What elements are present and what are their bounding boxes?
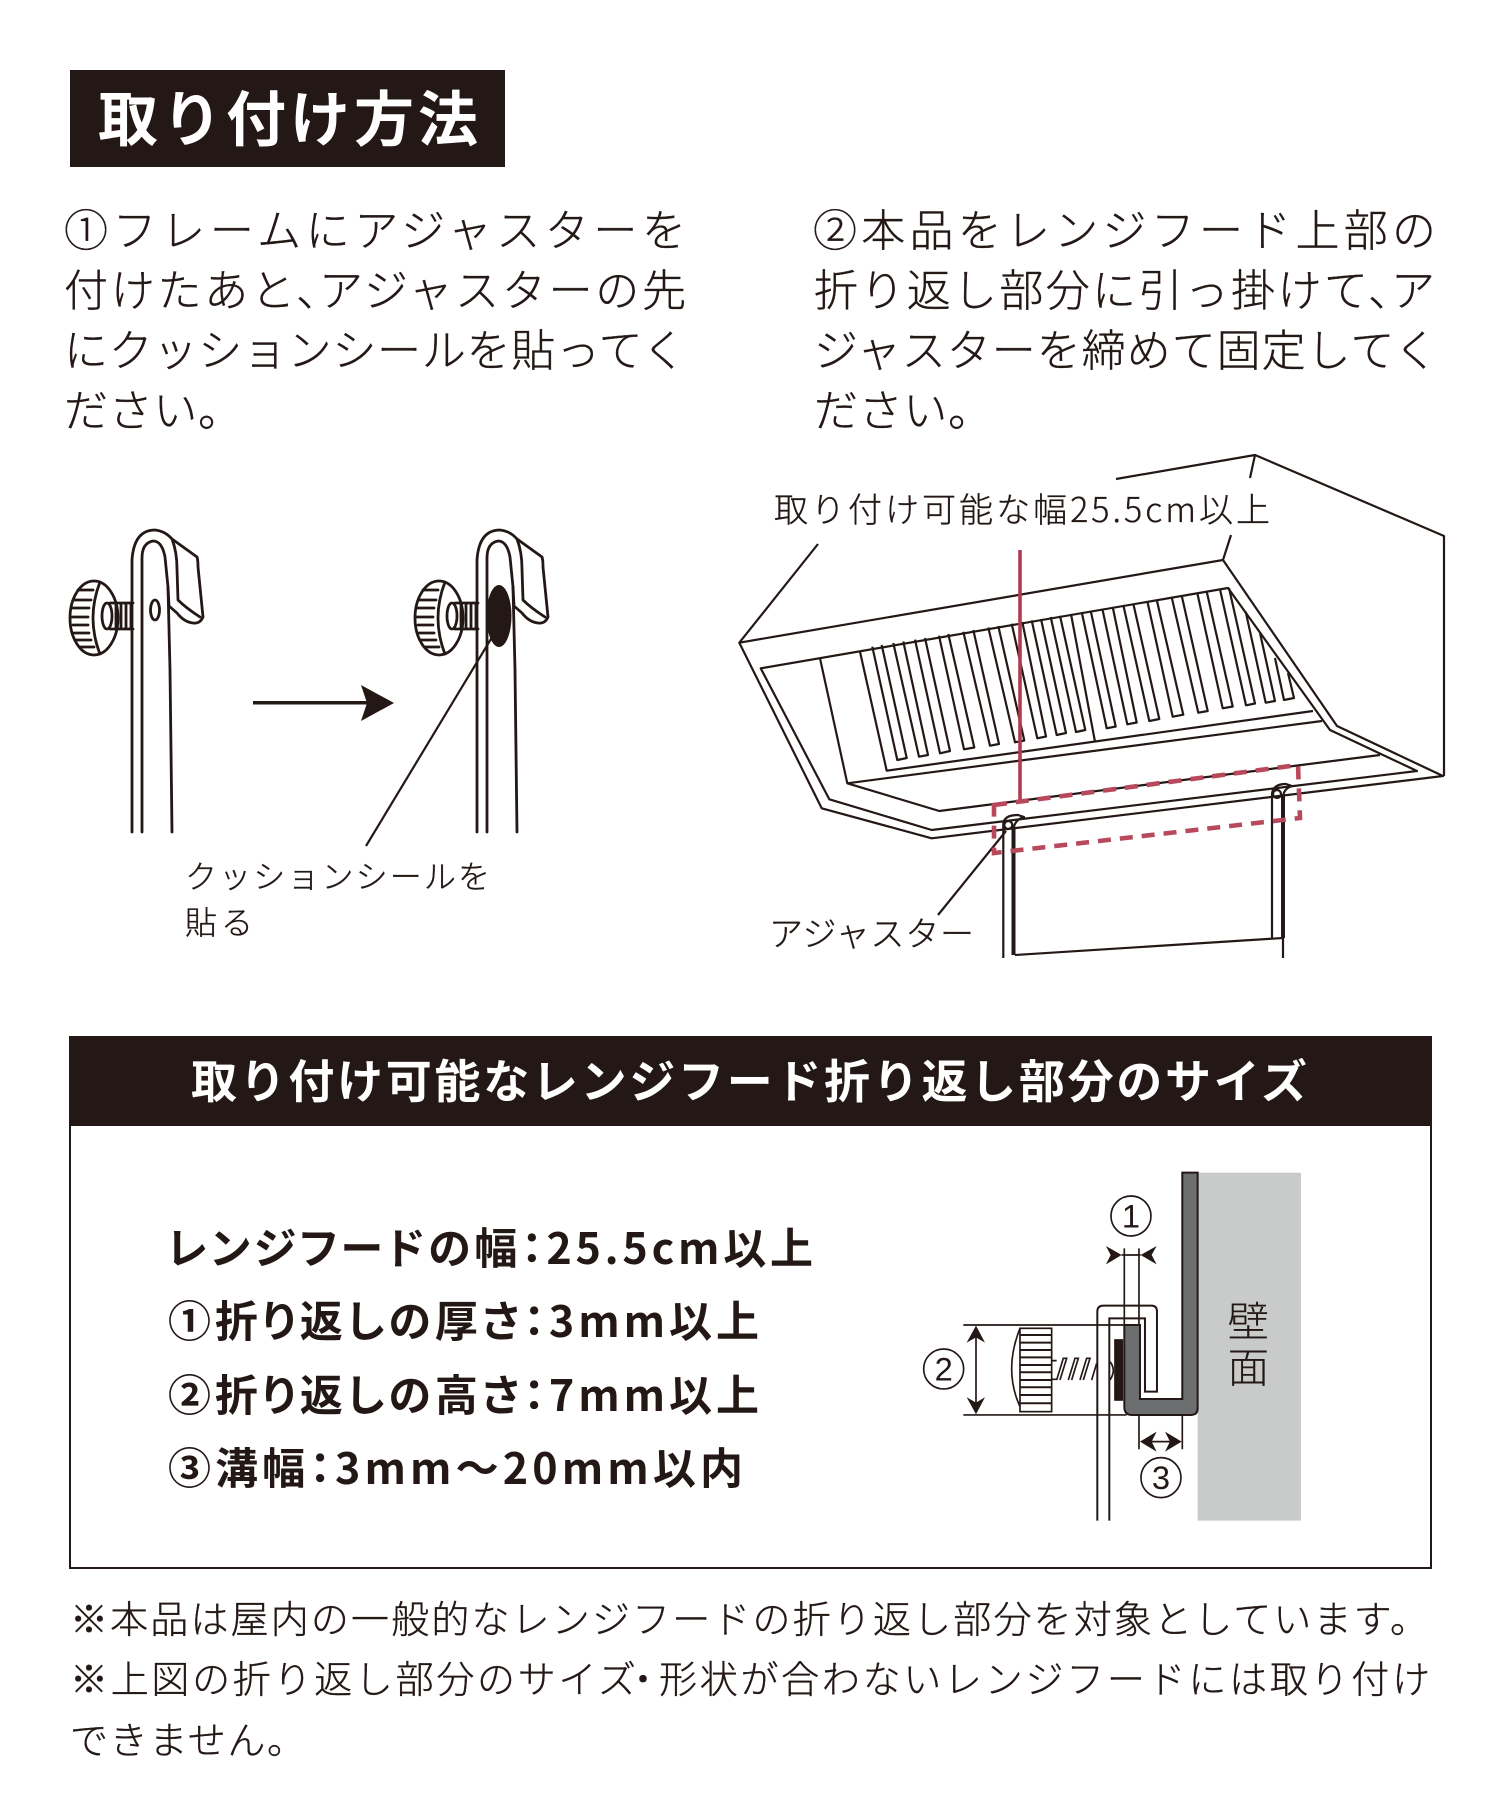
size list: ③溝幅：3mm～20mm以内: [168, 1435, 743, 1497]
panel heading: 取り付け可能なレンジフード折り返し部分のサイズ: [191, 1046, 1307, 1112]
text block: step 1: [64, 195, 686, 439]
diagram: adjuster and cushion seal: [70, 530, 548, 944]
hood fold bracket: [1124, 1173, 1198, 1415]
text block: step 2: ださい。: [814, 375, 992, 439]
callout: cushion seal: クッションシールを: [185, 852, 490, 898]
label 2: 2: [935, 1350, 953, 1387]
size list: ②折り返しの高さ：7mm以上: [168, 1362, 759, 1424]
label 1: [1111, 1196, 1151, 1236]
icon: hook frame with adjuster: [70, 530, 203, 832]
size list: ①折り返しの厚さ：3mm以上: [168, 1288, 759, 1350]
footnotes: ※本品は屋内の一般的なレンジフードの折り返し部分を対象としています。: [70, 1589, 1428, 1644]
callout: cushion seal: 貼る: [185, 898, 253, 944]
text block: step 1: ①フレームにアジャスターを: [64, 195, 686, 259]
adjuster knob and screw: [1012, 1328, 1122, 1412]
arrow: [253, 685, 394, 721]
text block: step 2: ジャスターを締めて固定してく: [814, 315, 1438, 379]
diagram: range hood: [739, 455, 1444, 958]
hood outline: [739, 455, 1444, 838]
footnotes: [70, 1589, 1430, 1765]
text block: step 2: ②本品をレンジフード上部の: [813, 195, 1436, 259]
label: adjuster: アジャスター: [769, 907, 974, 956]
size list: レンジフードの幅：25.5cm以上: [167, 1215, 813, 1277]
label 3: [1141, 1458, 1181, 1498]
panel heading: [69, 1036, 1432, 1126]
label 2: [924, 1349, 964, 1389]
label: mountable width: 取り付け可能な幅25.5cm以上: [774, 483, 1270, 532]
dimension lines: [963, 1248, 1182, 1449]
diagram: fold cross-section: [924, 1173, 1301, 1521]
text block: step 1: にクッションシールを貼ってく: [64, 315, 686, 379]
callout: cushion seal: [185, 852, 490, 944]
size list: [167, 1215, 813, 1497]
footnotes: 形状が合わないレンジフードには取り付け: [659, 1649, 1430, 1704]
text block: step 1: ださい。: [64, 375, 242, 439]
text block: step 1: 付けたあと、: [64, 255, 340, 319]
text block: step 2: [813, 195, 1438, 439]
text block: step 2: 折り返し部分に引っ掛けて、: [814, 255, 1412, 319]
arrows: [967, 1246, 1182, 1452]
filter slats: [872, 588, 1294, 760]
wall: 壁: [1227, 1289, 1269, 1349]
footnotes: ※上図の折り返し部分のサイズ: [70, 1649, 636, 1704]
wall: [1198, 1173, 1301, 1521]
panel: supported fold size: [69, 1036, 1432, 1568]
footnotes: ・: [624, 1649, 662, 1704]
frame outline: [1097, 1306, 1157, 1521]
frame with hooks: [938, 784, 1292, 958]
title: 取り付け方法: [98, 72, 478, 159]
text block: step 2: ア: [1391, 255, 1435, 319]
label 1: 1: [1122, 1197, 1140, 1234]
footnotes: できません。: [70, 1710, 305, 1765]
label 3: 3: [1152, 1459, 1170, 1496]
icon: hook frame with cushion seal: [366, 530, 548, 846]
text block: step 1: アジャスターの先: [319, 255, 686, 319]
wall: 面: [1227, 1334, 1269, 1394]
red width indicator: [994, 550, 1300, 853]
